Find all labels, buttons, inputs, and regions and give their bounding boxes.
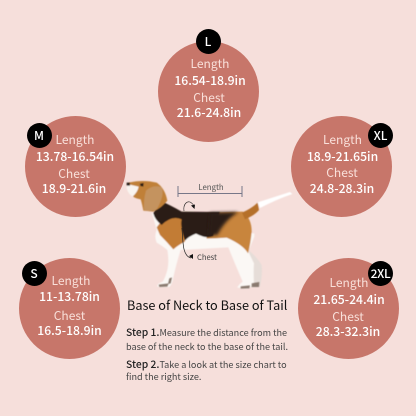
heading: Base of Neck to Base of Tail [127, 295, 287, 314]
badge: L [196, 29, 220, 54]
panel: size L: 21.6-24.8in [177, 102, 241, 120]
length marker [178, 182, 242, 197]
panel: size XL: 24.8-28.3in [310, 178, 374, 196]
panel: size S: Length [52, 272, 90, 288]
chest arrow bottom [182, 228, 193, 259]
chest arrow top [184, 202, 195, 211]
panel: size 2XL: Length [330, 274, 368, 290]
chest label: Chest [197, 252, 217, 263]
badge: S [22, 261, 46, 286]
panel: size S: 16.5-18.9in [37, 320, 102, 338]
panel: size S: 11-13.78in [39, 286, 100, 304]
badge: XL: XL [374, 127, 387, 144]
panel: size M: 13.78-16.54in [36, 146, 114, 164]
panel: size M: Chest [58, 164, 90, 182]
panel: size XL: Length [323, 130, 362, 148]
panel: size XL: Chest [326, 164, 358, 180]
panel: size L: 16.54-18.9in [174, 70, 246, 88]
badge: XL [368, 123, 393, 148]
panel: size L: Chest [193, 88, 225, 106]
panel: size 2XL [298, 258, 398, 358]
panel: size M: Length [56, 130, 94, 148]
panel: size S: Chest [54, 306, 85, 324]
badge: L: L [205, 33, 211, 50]
text block: steps: find the right size. [126, 369, 201, 383]
panel: size M: 18.9-21.6in [42, 178, 106, 196]
panel: size L: Length [191, 54, 229, 72]
text block: steps: Step 2.Take a look at the size chart to [126, 356, 287, 371]
panel: size XL [290, 116, 392, 216]
badge: 2XL [368, 261, 393, 286]
badge: 2XL: 2XL [371, 265, 390, 282]
text block: steps: Step 1.Measure the distance from the [126, 324, 287, 339]
panel: size 2XL: 28.3-32.3in [316, 322, 380, 340]
badge: S: S [30, 265, 38, 282]
panel: size S [19, 258, 120, 358]
badge: M: M [34, 127, 44, 144]
panel: size 2XL: 21.65-24.4in [313, 290, 385, 308]
panel: size XL: 18.9-21.65in [307, 146, 378, 164]
panel: size M [24, 116, 126, 216]
panel: size 2XL: Chest [332, 308, 364, 324]
dog [127, 181, 292, 289]
text block: steps: base of the neck to the base of the tail. [126, 339, 288, 353]
length label: Length [198, 182, 224, 193]
text block: steps [126, 324, 288, 383]
panel: size L [158, 40, 258, 142]
badge: M [26, 123, 52, 148]
